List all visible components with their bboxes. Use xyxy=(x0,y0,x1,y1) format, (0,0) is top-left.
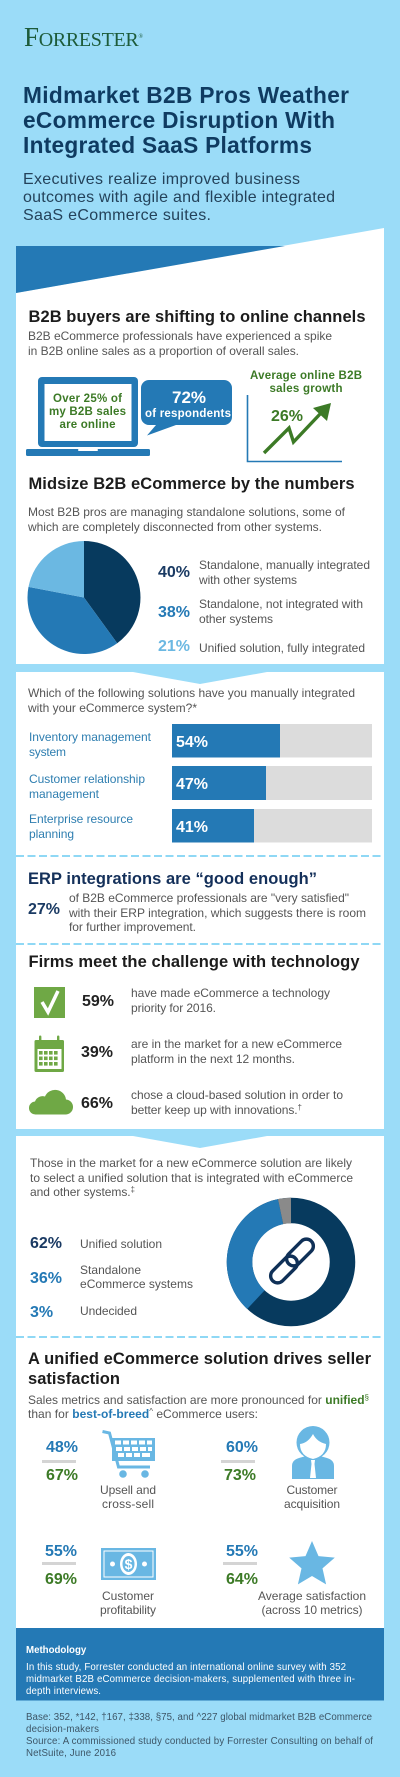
legend: 36%: 36% xyxy=(30,1270,62,1287)
text: online sales spike: in B2B online sales as a proportion of overall sales. xyxy=(28,344,299,358)
icon: calendar xyxy=(34,1036,64,1072)
text: likely to select unified: ‡ xyxy=(131,1185,135,1194)
title: eCommerce Disruption With xyxy=(23,107,335,133)
bar: erp xyxy=(29,809,372,842)
bar: inventory: Inventory management xyxy=(29,730,152,744)
label: profitability: Customer xyxy=(102,1589,154,1603)
panel: integrations and technology xyxy=(16,672,384,1129)
stat: 66%: † xyxy=(298,1103,302,1112)
icon: laptop: are online xyxy=(60,419,116,431)
stat: profitability: 55% xyxy=(45,1543,77,1560)
stat: 27%: 27% xyxy=(28,901,60,918)
stat: 59%: 59% xyxy=(82,993,114,1010)
subtitle: Executives realize improved business xyxy=(23,171,300,188)
stat: average satisfaction xyxy=(223,1543,258,1588)
icon: laptop xyxy=(26,377,150,456)
callout: 72% of respondents: of respondents xyxy=(145,408,231,420)
text: survey question xyxy=(27,686,355,715)
text: likely to select unified: and other systems. xyxy=(30,1185,131,1199)
legend: 36%: eCommerce systems xyxy=(80,1277,193,1291)
legend: 38% xyxy=(158,597,363,626)
text: online sales spike: B2B eCommerce professionals have experienced a spike xyxy=(28,329,332,343)
text: unified vs best-of-breed xyxy=(28,1393,369,1421)
footnotes: decision-makers xyxy=(26,1724,99,1735)
legend: 38%: 38% xyxy=(158,604,190,621)
callout: 72% of respondents xyxy=(141,380,232,436)
logo: FORRESTER xyxy=(24,22,139,52)
stat: 66% xyxy=(81,1088,343,1117)
legend: 62% xyxy=(30,1235,162,1252)
logo: ® xyxy=(138,33,143,40)
subtitle: SaaS eCommerce suites. xyxy=(23,207,211,224)
heading: seller satisfaction: satisfaction xyxy=(28,1370,120,1388)
legend: 62%: 62% xyxy=(30,1235,62,1252)
subtitle xyxy=(23,171,335,224)
text: standalone solutions xyxy=(27,505,346,534)
panel: methodology xyxy=(16,1628,384,1700)
footnotes xyxy=(26,1712,373,1759)
text: unified vs best-of-breed: § xyxy=(365,1393,369,1402)
stat: 27%: of B2B eCommerce professionals are "very satisfied" xyxy=(69,891,349,905)
icon: laptop: Over 25% of xyxy=(53,393,122,405)
stat: average satisfaction: 55% xyxy=(226,1543,258,1560)
chart: sales growth: 26% xyxy=(271,408,303,425)
text: unified vs best-of-breed: Sales metrics and satisfaction are more pronounced for unified xyxy=(28,1393,365,1407)
stat: 27%: for further improvement. xyxy=(69,920,196,934)
text: online sales spike xyxy=(28,329,332,358)
bar: erp: Enterprise resource xyxy=(29,812,133,826)
stat: upsell: 67% xyxy=(46,1467,78,1484)
text: unified vs best-of-breed: than for best-of-breed xyxy=(28,1407,149,1421)
heading: seller satisfaction xyxy=(28,1350,372,1388)
label: acquisition xyxy=(284,1483,340,1511)
stat: 59%: have made eCommerce a technology xyxy=(131,986,330,1000)
stat: 66%: chose a cloud-based solution in order to xyxy=(131,1088,343,1102)
legend: 21%: Unified solution, fully integrated xyxy=(199,641,365,655)
icon: dollar bill xyxy=(101,1548,156,1580)
text: likely to select unified: to select a unified solution that is integrated with eCommerce xyxy=(30,1171,353,1185)
icon: chain links xyxy=(268,1236,316,1286)
pie chart xyxy=(27,541,140,654)
legend: 36%: Standalone xyxy=(80,1263,141,1277)
banner wedge xyxy=(16,246,285,293)
stat: acquisition: 60% xyxy=(226,1439,258,1456)
subtitle: outcomes with agile and flexible integrated xyxy=(23,189,335,206)
stat: upsell xyxy=(42,1439,78,1484)
legend: 3% xyxy=(30,1304,137,1321)
legend: 38%: Standalone, not integrated with xyxy=(199,597,363,611)
legend: 21%: 21% xyxy=(158,638,190,655)
icon: shopping cart xyxy=(102,1432,155,1478)
chart: sales growth xyxy=(248,370,362,462)
stat: 39%: 39% xyxy=(81,1044,113,1061)
stat: 27% xyxy=(28,891,366,934)
label: profitability: profitability xyxy=(100,1603,156,1617)
donut chart xyxy=(240,1210,342,1314)
legend: 36% xyxy=(30,1263,193,1291)
icon: dollar bill: $ xyxy=(125,1556,133,1572)
bar: crm: 47% xyxy=(176,776,208,793)
heading: by the numbers: Midsize B2B eCommerce by the numbers xyxy=(28,475,354,493)
text: likely to select unified: Those in the market for a new eCommerce solution are likely xyxy=(30,1156,352,1170)
stat: 59% xyxy=(82,986,330,1015)
legend: 3%: 3% xyxy=(30,1304,53,1321)
label: average satisfaction xyxy=(258,1589,366,1617)
bar: erp: planning xyxy=(29,827,74,841)
label: profitability xyxy=(100,1589,156,1617)
text: unified vs best-of-breed: ^ xyxy=(149,1407,153,1416)
bar: crm: management xyxy=(29,787,100,801)
stat: 39% xyxy=(81,1037,342,1066)
icon: cloud xyxy=(29,1090,73,1115)
footnotes: NetSuite, June 2016 xyxy=(26,1748,116,1759)
chart: sales growth: sales growth xyxy=(270,383,342,395)
legend: 40%: with other systems xyxy=(198,573,297,587)
text: methodology: In this study, Forrester conducted an international online survey with 352 xyxy=(26,1662,346,1673)
label: average satisfaction: Average satisfaction xyxy=(258,1589,366,1603)
bar: crm xyxy=(29,766,372,801)
bar: inventory: 54% xyxy=(176,734,208,751)
text: standalone solutions: which are completely disconnected from other systems. xyxy=(27,520,322,534)
icon: star xyxy=(289,1541,335,1584)
stat: upsell: 48% xyxy=(46,1439,78,1456)
label: average satisfaction: (across 10 metrics) xyxy=(262,1603,362,1617)
stat: acquisition: 73% xyxy=(224,1467,256,1484)
heading: technology: Firms meet the challenge with technology xyxy=(28,953,360,971)
text: unified vs best-of-breed: eCommerce users: xyxy=(153,1407,258,1421)
title xyxy=(23,82,349,158)
legend: 38%: other systems xyxy=(199,612,273,626)
icon: person xyxy=(292,1426,334,1479)
text: methodology: midmarket B2B eCommerce decision-makers, supplemented with three in- xyxy=(26,1674,355,1685)
heading: methodology: Methodology xyxy=(26,1645,87,1656)
heading: ERP: ERP integrations are “good enough” xyxy=(28,870,317,888)
bar: inventory xyxy=(29,724,372,759)
icon: laptop: my B2B sales xyxy=(49,406,126,418)
text: standalone solutions: Most B2B pros are managing standalone solutions, some of xyxy=(28,505,346,519)
stat: 66%: better keep up with innovations. xyxy=(131,1103,298,1117)
bar: erp: 41% xyxy=(176,819,208,836)
text: survey question: with your eCommerce system?* xyxy=(27,701,197,715)
footnotes: Source: A commissioned study conducted by Forrester Consulting on behalf of xyxy=(26,1736,373,1747)
panel: online channels and numbers xyxy=(16,228,384,664)
label: upsell: Upsell and xyxy=(100,1483,156,1497)
text: methodology: depth interviews. xyxy=(26,1686,101,1697)
stat: 27%: with their ERP integration, which suggests there is room xyxy=(68,906,366,920)
bar: inventory: system xyxy=(29,745,66,759)
stat: 39%: are in the market for a new eCommerce xyxy=(131,1037,342,1051)
heading: online channels: B2B buyers are shifting to online channels xyxy=(28,308,366,326)
title: Midmarket B2B Pros Weather xyxy=(23,82,349,108)
stat: 66%: 66% xyxy=(81,1095,113,1112)
stat: 59%: priority for 2016. xyxy=(131,1001,216,1015)
text: likely to select unified xyxy=(30,1156,353,1199)
bar: crm: Customer relationship xyxy=(29,772,145,786)
stat: acquisition xyxy=(221,1439,258,1484)
label: upsell: cross-sell xyxy=(102,1497,154,1511)
legend: 62%: Unified solution xyxy=(80,1237,162,1251)
icon: checkbox xyxy=(34,987,65,1018)
label: acquisition: acquisition xyxy=(284,1497,340,1511)
text: survey question: Which of the following solutions have you manually integrated xyxy=(28,686,355,700)
title: Integrated SaaS Platforms xyxy=(23,132,312,158)
stat: profitability xyxy=(42,1543,77,1588)
callout: 72% of respondents: 72% xyxy=(172,388,206,407)
stat: average satisfaction: 64% xyxy=(226,1571,258,1588)
label: upsell xyxy=(100,1483,156,1511)
footnotes: Base: 352, *142, †167, ‡338, §75, and ^227 global midmarket B2B eCommerce xyxy=(26,1712,372,1723)
text: methodology xyxy=(26,1662,355,1697)
heading: seller satisfaction: A unified eCommerce solution drives seller xyxy=(28,1350,372,1368)
chart: sales growth: Average online B2B xyxy=(250,370,362,382)
legend: 40% xyxy=(158,558,370,587)
legend: 21% xyxy=(158,638,365,655)
legend: 3%: Undecided xyxy=(80,1304,137,1318)
stat: profitability: 69% xyxy=(45,1571,77,1588)
legend: 40%: 40% xyxy=(158,564,190,581)
stat: 39%: platform in the next 12 months. xyxy=(131,1052,295,1066)
legend: 40%: Standalone, manually integrated xyxy=(199,558,370,572)
label: acquisition: Customer xyxy=(286,1483,338,1497)
panel: unified solutions and methodology xyxy=(16,1136,384,1628)
